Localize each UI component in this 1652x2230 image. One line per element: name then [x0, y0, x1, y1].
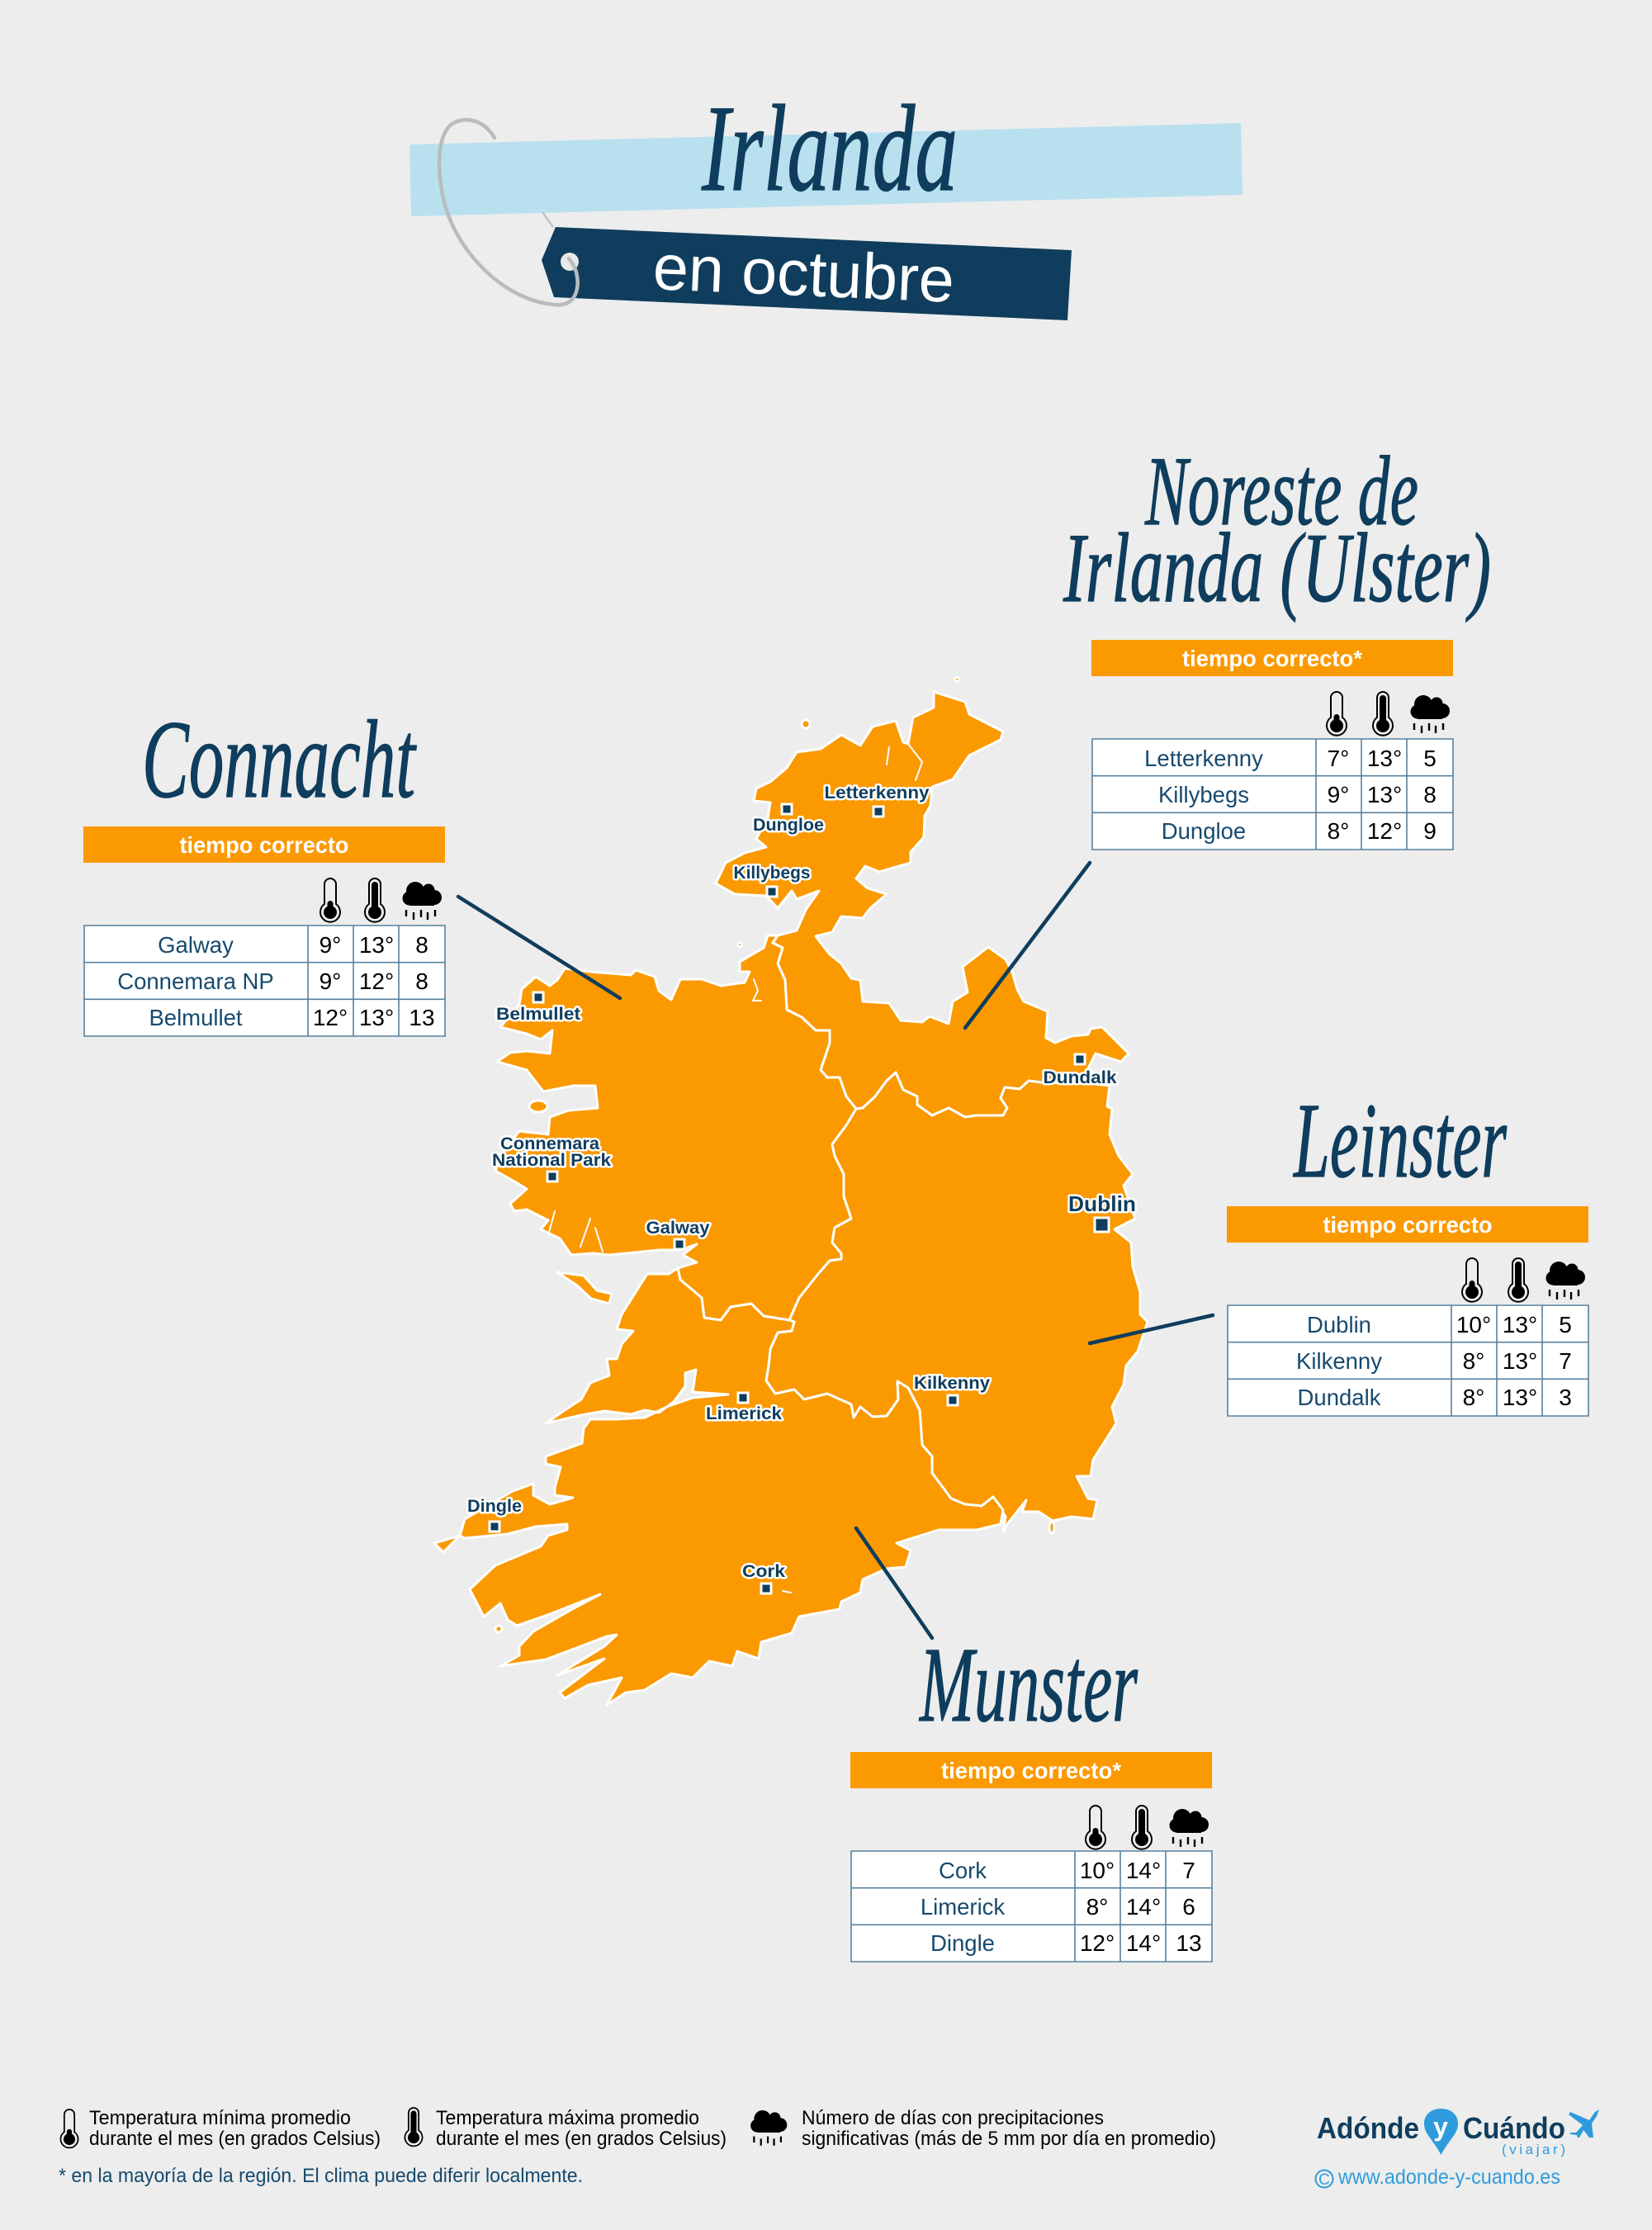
copyright mark: C: [1318, 2171, 1330, 2189]
data rows: 8°: [1328, 818, 1349, 844]
data rows: 14°: [1126, 1858, 1161, 1883]
data rows: Killybegs: [1158, 782, 1249, 807]
inlets and lakes: [548, 744, 922, 1593]
icon: max temperature: [365, 878, 385, 922]
legend: [59, 2107, 1216, 2187]
data rows: Connemara NP: [117, 968, 274, 994]
logo: Adónde y Cuándo: [1316, 2109, 1599, 2189]
data rows: 13°: [1503, 1312, 1537, 1338]
leader line: Leinster: [1090, 1315, 1213, 1343]
data rows: 7°: [1328, 746, 1349, 771]
data rows: 8°: [1463, 1385, 1484, 1410]
region: Ulster: [716, 692, 1129, 1117]
weather table: Connacht: [83, 826, 445, 1036]
data rows: [84, 926, 445, 1036]
icon: rain days: [1545, 1262, 1585, 1300]
city: Belmullet: [496, 992, 580, 1024]
data rows: 10°: [1456, 1312, 1491, 1338]
city: Dingle: Dingle: [467, 1497, 522, 1516]
data rows: Dingle: [930, 1930, 995, 1956]
subtitle: en octubre: en octubre: [651, 230, 956, 316]
data rows: 12°: [313, 1005, 348, 1030]
banner: [1227, 1206, 1588, 1243]
data rows: 9°: [1328, 782, 1349, 807]
data rows: 9°: [320, 932, 341, 958]
heading: Leinster: Leinster: [1293, 1082, 1507, 1200]
data rows: Kilkenny: [1296, 1348, 1382, 1374]
legend text: max temperature: Temperatura máxima promedio: [436, 2107, 699, 2129]
data rows: 13°: [1503, 1348, 1537, 1374]
wordmark left: Adónde: [1317, 2111, 1419, 2145]
leader line: Connacht: [458, 897, 620, 998]
data rows: 10°: [1080, 1858, 1115, 1883]
website: www.adonde-y-cuando.es: [1337, 2166, 1560, 2189]
city: Dingle: [467, 1497, 522, 1532]
city: Kilkenny: Kilkenny: [914, 1374, 990, 1393]
data rows: 7: [1182, 1858, 1195, 1883]
tag string: [542, 212, 553, 227]
legend text: max temperature: [436, 2107, 727, 2150]
data rows: 12°: [1367, 818, 1402, 844]
data rows: Letterkenny: [1144, 746, 1263, 771]
city: Connemara National Park: [492, 1134, 611, 1181]
city: Galway: [646, 1219, 710, 1249]
title block: [409, 80, 1243, 320]
region: Munster: [434, 1268, 1003, 1705]
data rows: 13°: [359, 1005, 394, 1030]
legend text: min temperature: durante el mes (en grados Celsius): [89, 2128, 381, 2150]
data rows: 12°: [1080, 1930, 1115, 1956]
data rows: 8°: [1463, 1348, 1484, 1374]
data rows: 13: [409, 1005, 435, 1030]
data rows: 9: [1423, 818, 1437, 844]
data rows: [851, 1851, 1212, 1962]
city: Dungloe: [753, 804, 824, 835]
subtitle tag: [542, 227, 1072, 320]
city: Limerick: [706, 1393, 782, 1423]
icon: max temperature: [1373, 692, 1393, 736]
data rows: 13°: [1367, 782, 1402, 807]
region: Leinster: [766, 1072, 1148, 1532]
icon: min temperature: [1086, 1806, 1105, 1849]
heading: Connacht: Connacht: [142, 698, 417, 821]
legend text: max temperature: durante el mes (en grados Celsius): [436, 2128, 727, 2150]
city labels: [467, 784, 1136, 1593]
icon: rain days: [403, 882, 442, 920]
data rows: Belmullet: [149, 1005, 243, 1030]
city: Letterkenny: [824, 784, 930, 817]
city: Killybegs: [733, 864, 811, 897]
data rows: 13°: [359, 932, 394, 958]
data rows: 7: [1559, 1348, 1572, 1374]
icon: legend max temperature: [405, 2108, 423, 2146]
city: Dublin: Dublin: [1068, 1191, 1136, 1216]
banner: [1091, 640, 1453, 676]
city: Connemara National Park: National Park: [492, 1151, 611, 1170]
weather table: Leinster: [1227, 1206, 1588, 1416]
title band: [409, 123, 1243, 216]
legend text: rain: Número de días con precipitaciones: [802, 2107, 1104, 2129]
city: Dublin: [1068, 1191, 1136, 1232]
data rows: 6: [1182, 1894, 1195, 1920]
region: Connacht: [495, 935, 856, 1320]
city: Killybegs: Killybegs: [733, 864, 811, 883]
icon: plane: [1569, 2109, 1599, 2138]
icon: rain days: [1410, 695, 1450, 733]
city: Cork: [742, 1562, 785, 1593]
ring loop: [439, 120, 578, 305]
legend text: min temperature: Temperatura mínima promedio: [89, 2107, 351, 2129]
weather table: Ulster: [1091, 640, 1453, 850]
panel: Munster: [850, 1626, 1212, 1962]
banner: tiempo correcto*: [1182, 646, 1362, 671]
panel: Leinster: [1227, 1082, 1588, 1416]
legend text: rain: [802, 2107, 1216, 2150]
data rows: 8: [415, 932, 428, 958]
data rows: Dublin: [1307, 1312, 1371, 1338]
data rows: 3: [1559, 1385, 1572, 1410]
data rows: [1228, 1305, 1588, 1416]
city: Belmullet: Belmullet: [496, 1005, 580, 1024]
banner: tiempo correcto: [180, 832, 348, 858]
map of Ireland: [434, 677, 1148, 1705]
city: Kilkenny: [914, 1374, 990, 1405]
data rows: 9°: [320, 968, 341, 994]
panel: Connacht: [83, 698, 445, 1036]
data rows: 14°: [1126, 1894, 1161, 1920]
wordmark right: Cuándo: [1463, 2111, 1565, 2145]
heading: Noreste de Irlanda (Ulster): [1063, 436, 1491, 623]
icon: max temperature: [1508, 1258, 1528, 1302]
data rows: 8: [415, 968, 428, 994]
icon: max temperature: [1132, 1806, 1152, 1849]
data rows: 5: [1423, 746, 1437, 771]
icon: rain days: [1169, 1809, 1209, 1847]
data rows: 13: [1176, 1930, 1202, 1956]
data rows: [1092, 739, 1453, 850]
city: Letterkenny: Letterkenny: [824, 784, 930, 803]
icon: min temperature: [1462, 1258, 1482, 1302]
icon: map pin: [1424, 2109, 1458, 2155]
heading: Noreste de Irlanda (Ulster): Noreste de: [1144, 436, 1418, 546]
title: Irlanda: Irlanda: [701, 80, 958, 217]
copyright mark: [1316, 2170, 1332, 2189]
icon: min temperature: [1327, 692, 1347, 736]
banner: [83, 826, 445, 863]
data rows: 5: [1559, 1312, 1572, 1338]
icon: min temperature: [320, 878, 340, 922]
leader line: Munster: [856, 1528, 932, 1638]
banner: [850, 1752, 1212, 1788]
icon: legend rain: [750, 2110, 787, 2146]
footnote: * en la mayoría de la región. El clima puede diferir localmente.: [59, 2165, 583, 2187]
weather table: Munster: [850, 1752, 1212, 1962]
city: Cork: Cork: [742, 1562, 785, 1581]
legend text: rain: significativas (más de 5 mm por día en promedio): [802, 2128, 1216, 2150]
tag hole: [561, 253, 579, 271]
city: Dundalk: [1044, 1054, 1117, 1087]
banner: tiempo correcto*: [941, 1758, 1121, 1783]
data rows: Cork: [939, 1858, 987, 1883]
panel: Noreste de Irlanda (Ulster): [1063, 436, 1491, 850]
city: Dundalk: Dundalk: [1044, 1068, 1117, 1087]
banner: tiempo correcto: [1323, 1212, 1493, 1238]
heading: Munster: Munster: [919, 1626, 1138, 1745]
data rows: Dungloe: [1162, 818, 1246, 844]
data rows: 13°: [1503, 1385, 1537, 1410]
data rows: 8°: [1086, 1894, 1108, 1920]
islands: [495, 677, 1054, 1632]
tagline: (viajar): [1502, 2142, 1565, 2157]
city: Galway: Galway: [646, 1219, 710, 1238]
data rows: Limerick: [921, 1894, 1005, 1920]
data rows: 8: [1423, 782, 1437, 807]
data rows: Dundalk: [1298, 1385, 1381, 1410]
city: Connemara National Park: Connemara: [500, 1134, 599, 1153]
pin letter: y: [1433, 2112, 1448, 2142]
data rows: Galway: [158, 932, 234, 958]
leader line: Ulster: [965, 863, 1090, 1028]
city: Dungloe: Dungloe: [753, 816, 824, 835]
legend text: min temperature: [89, 2107, 381, 2150]
city: Limerick: Limerick: [706, 1404, 782, 1423]
data rows: 13°: [1367, 746, 1402, 771]
icon: legend min temperature: [60, 2109, 78, 2147]
data rows: 12°: [359, 968, 394, 994]
data rows: 14°: [1126, 1930, 1161, 1956]
